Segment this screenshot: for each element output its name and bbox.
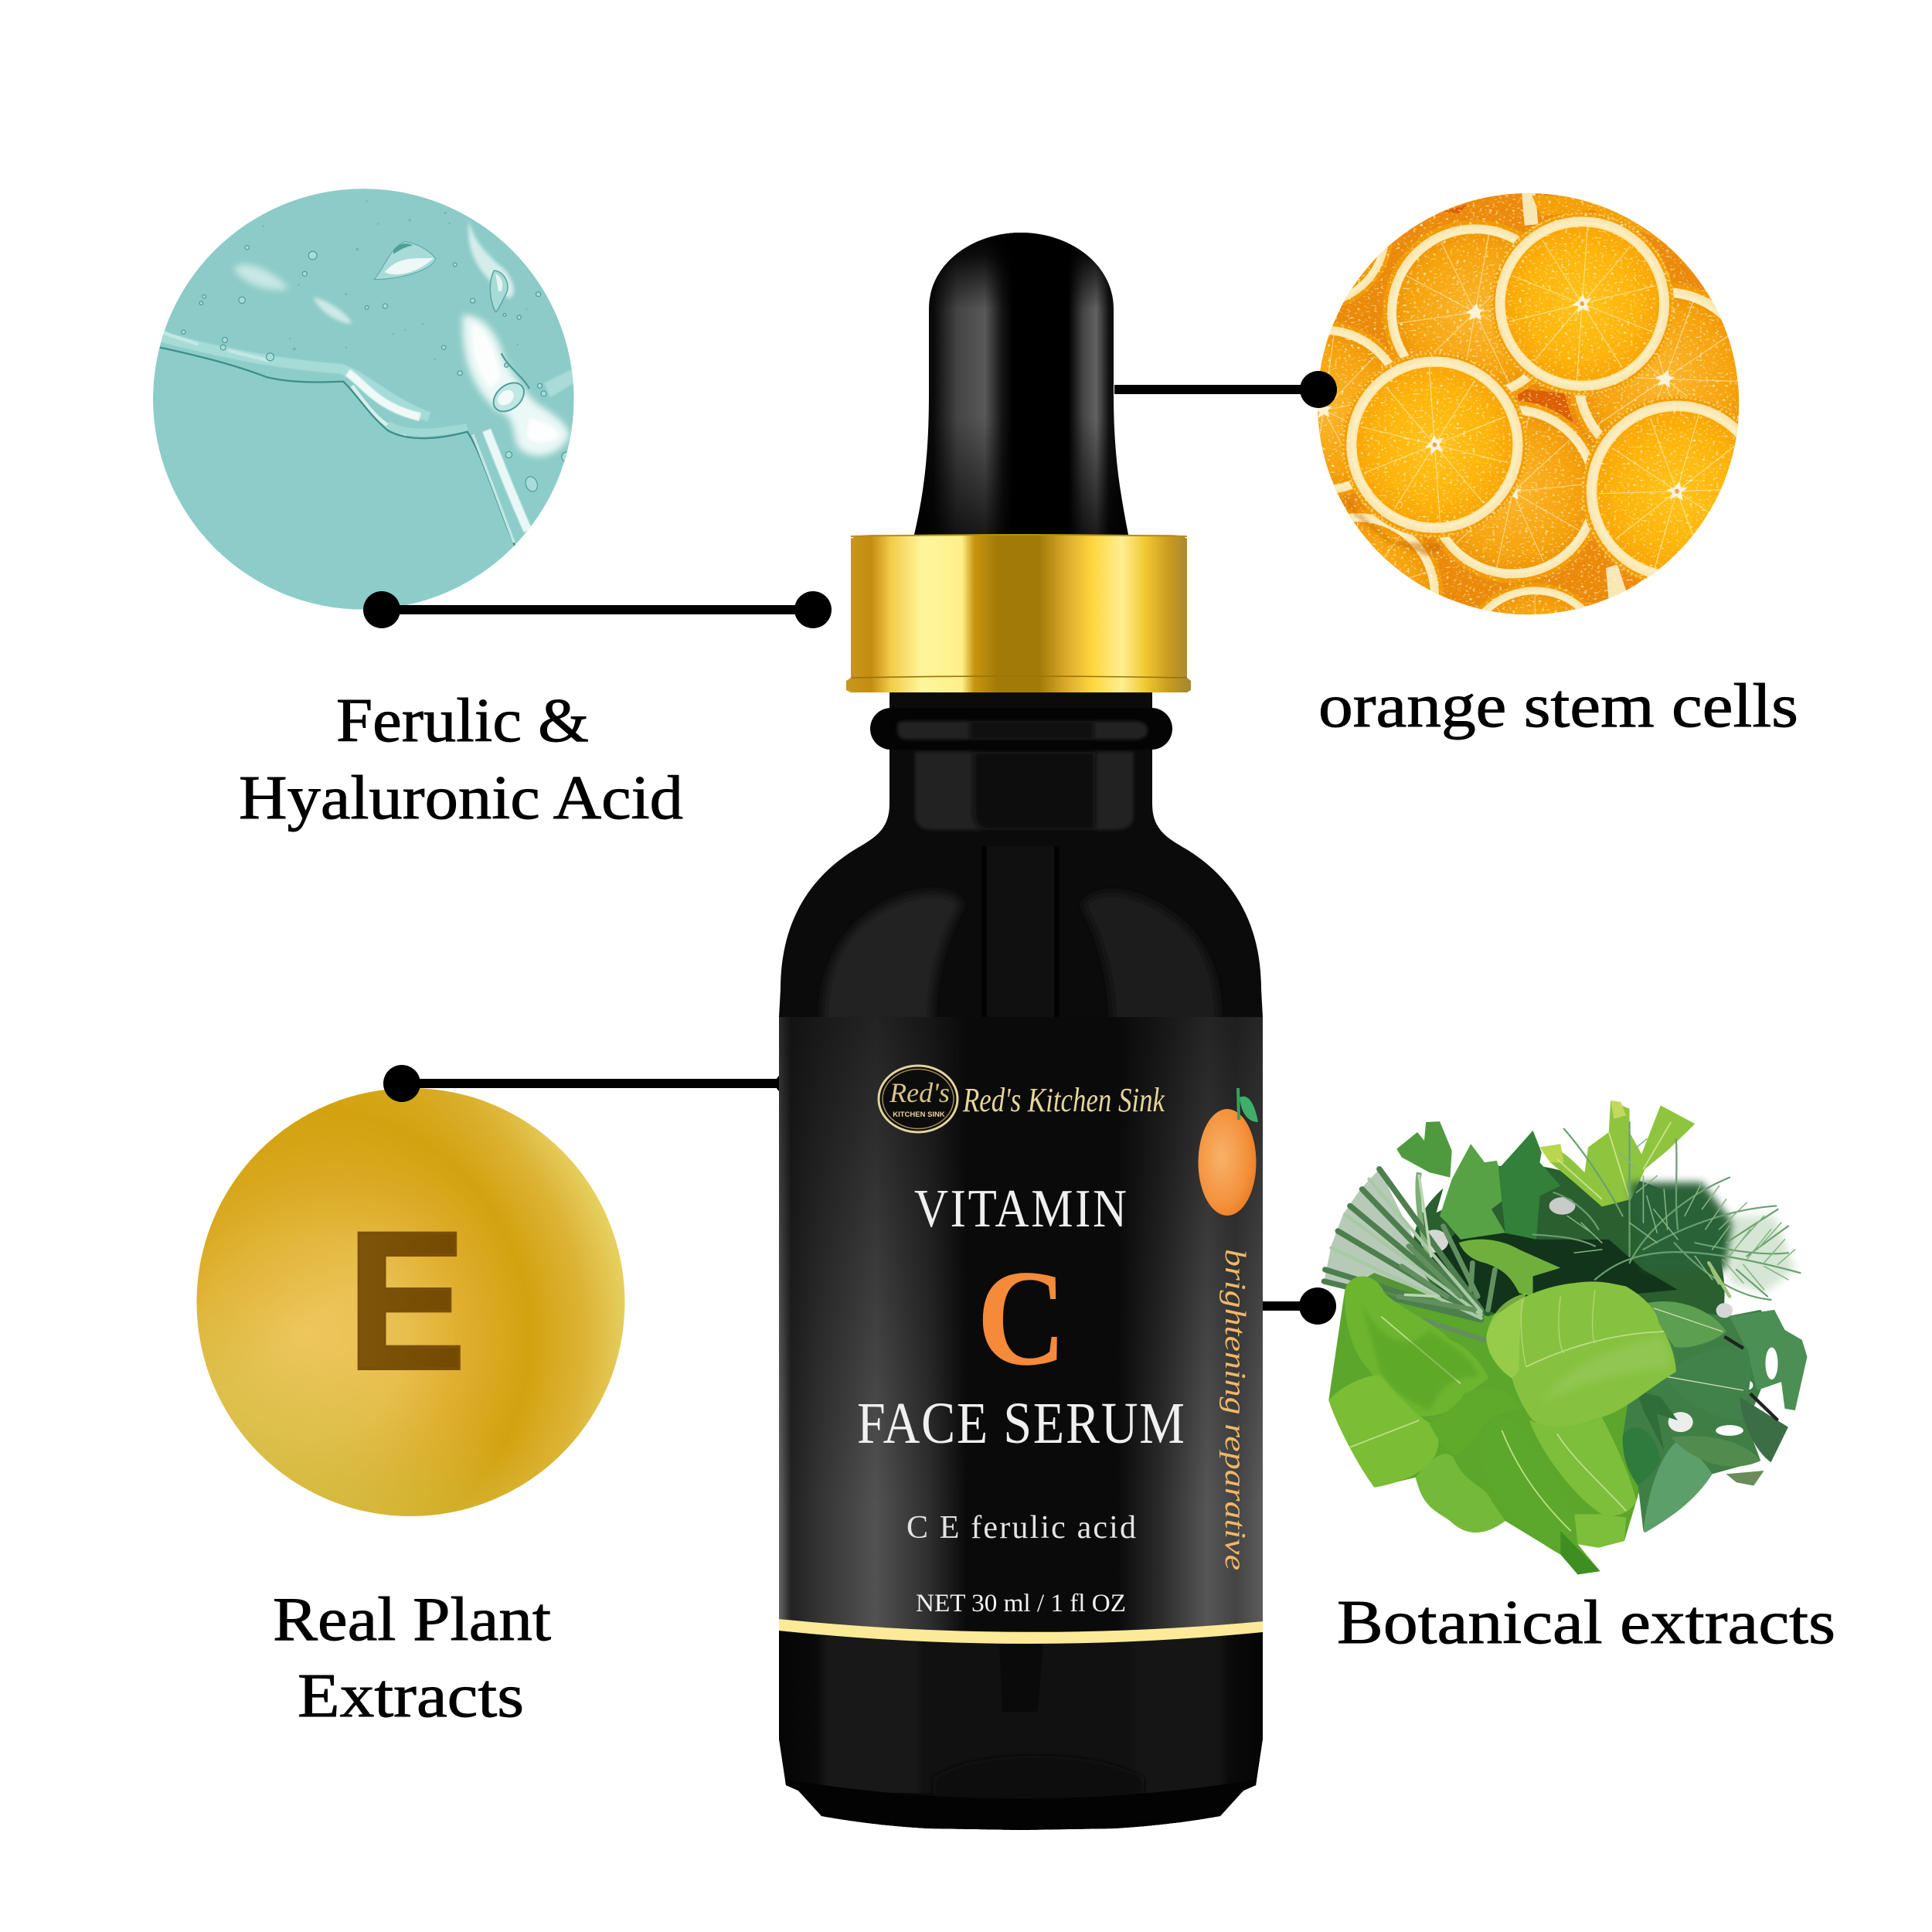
vitamin E letter: E — [347, 1191, 466, 1411]
connector: vitamin E circle to label — [383, 1065, 779, 1102]
vertical tagline: brightening reparative — [1219, 1249, 1251, 1570]
caption: real plant extracts: Extracts — [298, 1662, 524, 1730]
brand logo: Red's — [889, 1077, 950, 1108]
brand logo: KITCHEN SINK — [893, 1111, 945, 1119]
photo circle: sliced oranges — [1318, 193, 1739, 615]
gold vitamin E circle — [196, 1088, 624, 1516]
caption: ferulic and hyaluronic acid: Hyaluronic Acid — [239, 764, 683, 832]
photo cluster: fresh botanical herbs — [1324, 1100, 1807, 1574]
gold collar — [846, 535, 1191, 692]
photo circle: hyaluronic gel — [139, 170, 583, 610]
neck ring — [870, 708, 1172, 750]
caption: real plant extracts — [273, 1586, 551, 1730]
gold label stripe — [779, 1619, 1263, 1644]
bright basil leaves — [1328, 1277, 1676, 1574]
dill fronds — [1533, 1122, 1801, 1300]
rosemary sprig — [1324, 1169, 1495, 1340]
brand logo — [879, 1066, 957, 1132]
product bottle — [773, 233, 1269, 1839]
ingredient line: C E ferulic acid — [906, 1510, 1136, 1546]
orange fruit icon — [1198, 1088, 1258, 1216]
caption: ferulic and hyaluronic acid: Ferulic & — [336, 687, 589, 755]
caption: ferulic and hyaluronic acid — [239, 687, 683, 832]
arugula leaves — [1396, 1100, 1695, 1297]
caption: orange stem cells: orange stem cells — [1318, 672, 1798, 740]
brand script name: Red's Kitchen Sink — [962, 1081, 1165, 1119]
caption: botanical extracts: Botanical extracts — [1337, 1589, 1835, 1657]
net volume: NET 30 ml / 1 fl OZ — [916, 1590, 1126, 1617]
glass bottle body — [773, 680, 1269, 1839]
caption: real plant extracts: Real Plant — [273, 1586, 551, 1654]
label panel — [779, 1017, 1263, 1647]
connector: botanicals to label — [1263, 1287, 1336, 1325]
dropper bulb — [914, 233, 1128, 535]
FACE SERUM heading: FACE SERUM — [857, 1391, 1185, 1456]
foliage base masses — [1328, 1165, 1807, 1571]
connector: orange circle to bulb — [1114, 371, 1337, 408]
VITAMIN heading: VITAMIN — [914, 1179, 1127, 1239]
connector: gel circle to collar — [363, 591, 832, 628]
orange C: C — [977, 1241, 1066, 1394]
dark mint leaves — [1623, 1301, 1788, 1532]
